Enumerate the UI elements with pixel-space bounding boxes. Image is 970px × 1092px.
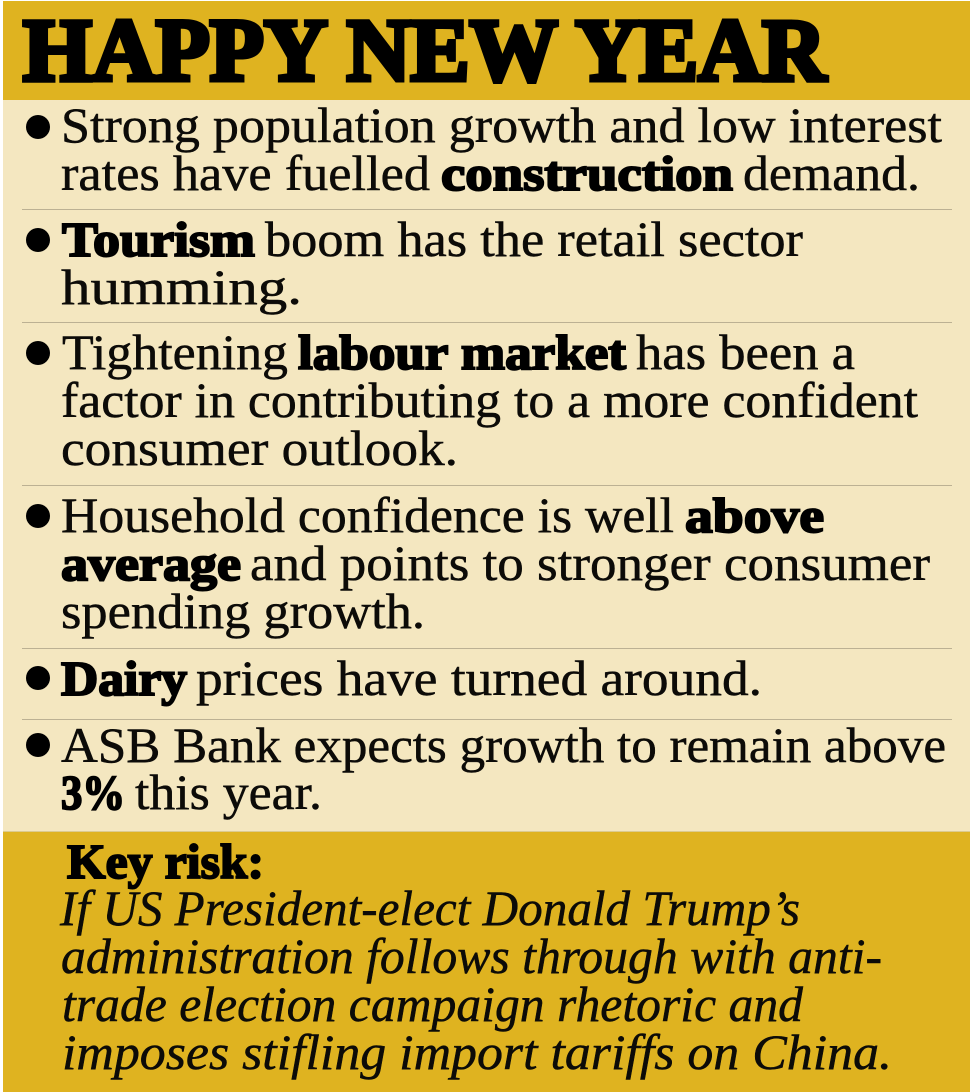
panel: bullet list (3, 97, 970, 832)
heading: Happy New Year: HAPPY NEW YEAR (23, 2, 828, 100)
bullet item: labour market: labour market (298, 325, 627, 380)
bullet item: labour market: Tightening (62, 324, 288, 380)
bullet item: construction: Strong population growth and low interest (61, 97, 942, 153)
panel: key risk (3, 831, 970, 1092)
bullet item: construction: demand. (743, 145, 920, 201)
bullet item: growth forecast: ASB Bank expects growth to remain above (61, 717, 946, 773)
panel: title banner (3, 1, 970, 100)
text block: key risk description: imposes stifling import tariffs on China. (62, 1024, 892, 1080)
bullet item: dairy: Dairy (61, 651, 188, 706)
bullet item: household confidence: average (61, 536, 241, 591)
bullet item: tourism (26, 211, 803, 315)
bullet item: construction: construction (441, 146, 733, 201)
text block: key risk description: trade election campaign rhetoric and (62, 976, 804, 1032)
bullet item: household confidence: above (685, 488, 824, 543)
bullet item: tourism: humming. (61, 259, 302, 315)
bullet item: household confidence: spending growth. (61, 583, 425, 639)
bullet item: growth forecast: this year. (135, 764, 322, 820)
bullet item: household confidence: and points to stronger consumer (250, 535, 930, 591)
text block: key risk description (59, 880, 892, 1080)
bullet item: construction: rates have fuelled (61, 145, 430, 201)
bullet item: dairy: prices have turned around. (196, 650, 762, 706)
text block: key risk description: administration follows through with anti- (61, 928, 882, 984)
bullet item: construction (26, 97, 942, 201)
bullet item: household confidence: Household confidence is well (61, 487, 674, 543)
bullet item: labour market (26, 324, 918, 476)
bullet item: labour market: consumer outlook. (61, 420, 458, 476)
bullet item: labour market: factor in contributing to a more confident (61, 372, 918, 428)
bullet item: household confidence (26, 487, 930, 639)
bullet item: growth forecast (26, 717, 946, 820)
bullet item: labour market: has been a (636, 324, 855, 380)
bullet item: growth forecast: 3% (61, 765, 125, 820)
bullet item: tourism: Tourism (62, 212, 255, 267)
text block: key risk description: If US President-elect Donald Trump’s (59, 880, 800, 936)
heading: key risk: Key risk: (67, 834, 264, 889)
bullet item: tourism: boom has the retail sector (265, 211, 803, 267)
